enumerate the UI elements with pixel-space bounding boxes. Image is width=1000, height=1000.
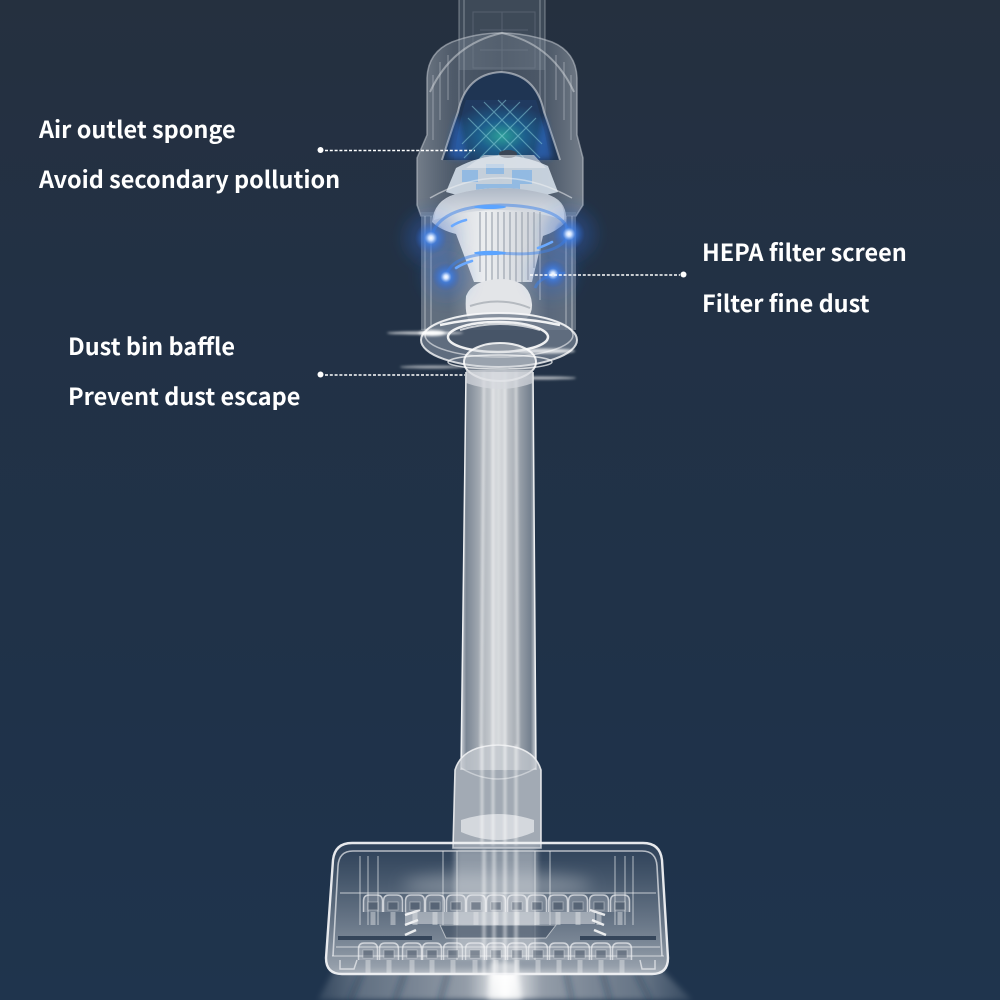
top row of bristles [364, 895, 630, 925]
callout: dust bin baffle: Dust bin baffle [68, 328, 235, 362]
callout: HEPA filter screen: HEPA filter screen [702, 234, 907, 268]
callout: air outlet sponge [38, 111, 475, 195]
connector sleeve [453, 745, 541, 848]
callout: HEPA filter screen [530, 234, 907, 319]
blue swirl of airflow [405, 205, 595, 299]
floor brush head [326, 843, 668, 975]
bottom row of bristles [358, 943, 632, 973]
callout: dust bin baffle: Prevent dust escape [68, 378, 300, 412]
motor housing [417, 33, 583, 216]
light spray under head [318, 962, 692, 1000]
callout: HEPA filter screen: Filter fine dust [702, 285, 870, 319]
callout: dust bin baffle [68, 328, 465, 412]
dust bin baffle ring [387, 313, 577, 380]
dust bin body [421, 210, 576, 330]
tube collar at baffle [448, 343, 552, 389]
circuit top of filter [430, 150, 572, 200]
HEPA filter [432, 188, 566, 282]
filter base [466, 279, 532, 324]
vacuum cleaner illustration [318, 0, 692, 1000]
callout: air outlet sponge: Air outlet sponge [38, 111, 236, 145]
callout: air outlet sponge: Avoid secondary pollution [38, 161, 340, 195]
blue mesh sponge [448, 100, 552, 160]
upper handle tube [459, 0, 545, 130]
long suction tube [461, 372, 536, 770]
